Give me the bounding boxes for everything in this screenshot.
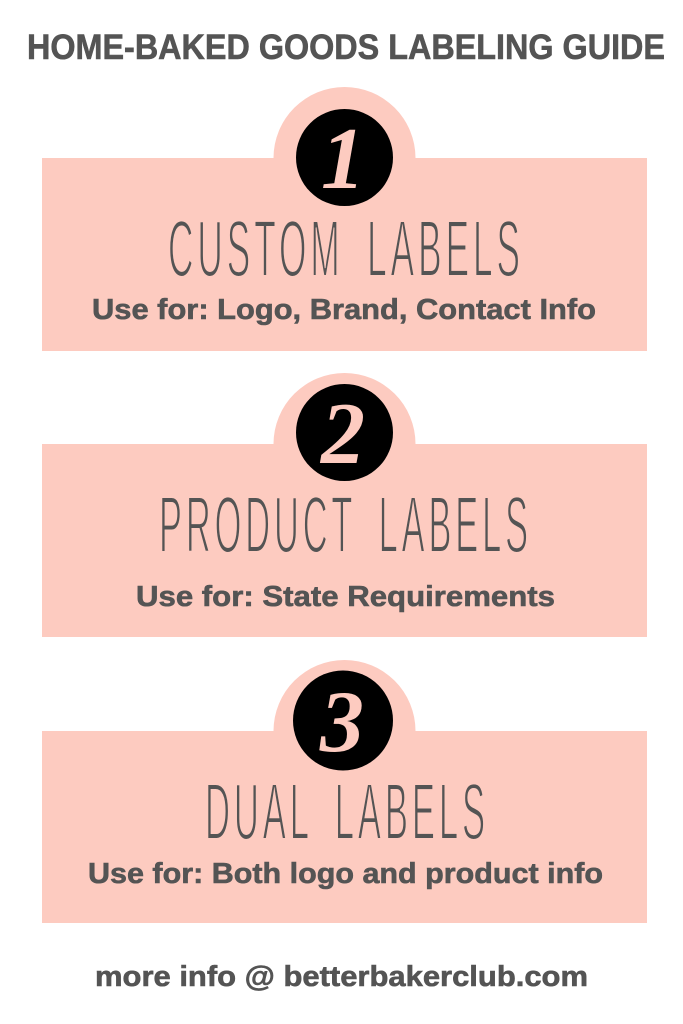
- footer: website: more info @ betterbakerclub.com: [95, 961, 588, 993]
- panel: product labels: [42, 373, 647, 637]
- icon: number 1 badge: 1: [321, 111, 365, 208]
- panel: dual labels: [42, 660, 647, 923]
- panel: custom labels: [42, 87, 647, 351]
- text: use for logo, brand, contact info: Use for: Logo, Brand, Contact Info: [92, 294, 596, 326]
- icon: number 2 badge: 2: [319, 386, 365, 483]
- text: use for state requirements: Use for: State Requirements: [136, 581, 555, 613]
- icon: number 2 badge: [296, 384, 393, 483]
- panel background shape: [42, 373, 647, 637]
- text: use for both logo and product info: Use for: Both logo and product info: [88, 858, 603, 890]
- icon: number 3 badge: [293, 670, 393, 771]
- panel background shape: [42, 87, 647, 351]
- panel background shape: [42, 660, 647, 923]
- icon: number 1 badge: [296, 109, 393, 208]
- icon: number 3 badge: 3: [319, 674, 364, 771]
